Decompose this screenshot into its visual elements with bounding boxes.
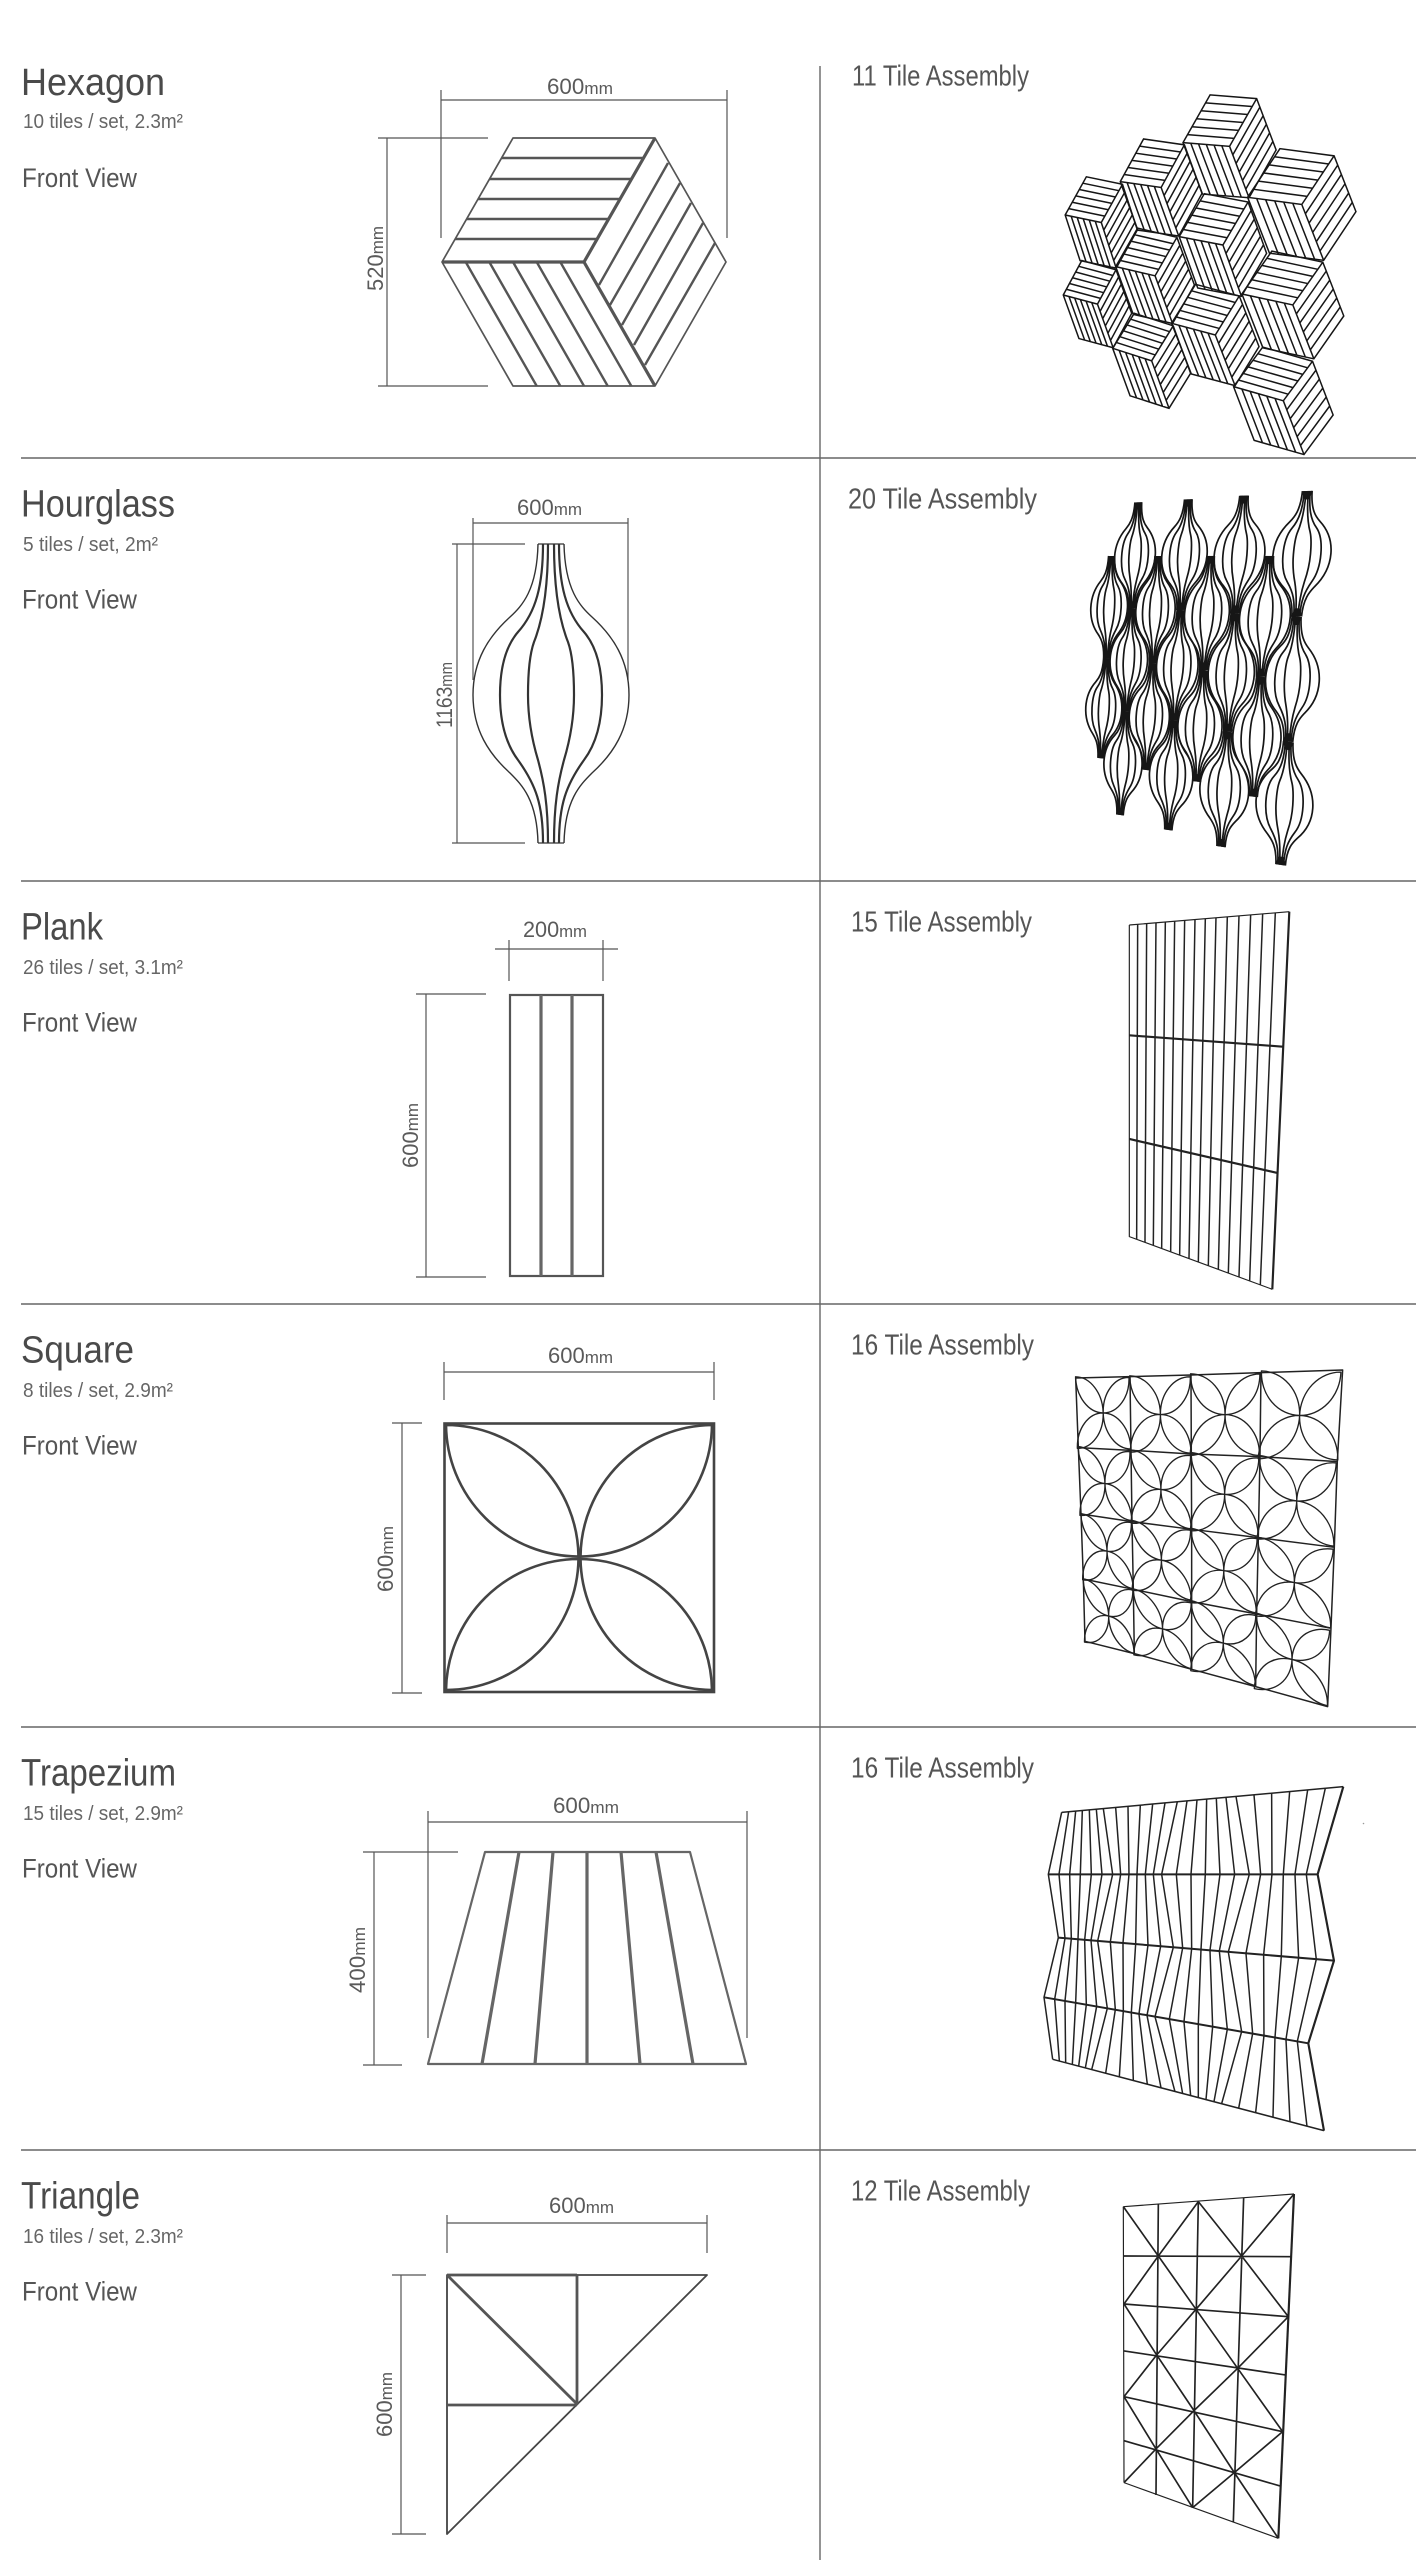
dimension: hexagon height: [363, 138, 488, 386]
assembly: hourglass tiles: [1083, 490, 1336, 869]
front view: hourglass tile: [473, 544, 629, 843]
label: 11 tile assembly: 11 Tile Assembly: [852, 60, 1029, 92]
dimension: trapezium height: 400mm: [345, 1927, 370, 1993]
heading: Triangle: Triangle: [21, 2176, 140, 2218]
dimension: hexagon width: 600mm: [547, 74, 613, 99]
front view: square tile: [444, 1424, 714, 1692]
dimension: square width: 600mm: [548, 1343, 613, 1368]
panel: hourglass row: [21, 484, 1336, 869]
heading: Trapezium: Trapezium: [21, 1752, 176, 1794]
front view: triangle tile: [447, 2275, 707, 2534]
dimension: triangle height: [372, 2275, 426, 2534]
heading: Plank: Plank: [21, 906, 104, 948]
assembly: plank tiles: [1129, 912, 1289, 1289]
panel: plank row: [21, 906, 1289, 1289]
panel: square row: [21, 1330, 1343, 1707]
assembly: triangle tiles: [1123, 2194, 1294, 2538]
dimension: plank height: 600mm: [398, 1103, 423, 1168]
panel: hexagon row: [21, 60, 1361, 462]
dimension: plank width: [495, 917, 618, 981]
label: front view: Front View: [22, 163, 137, 193]
front view: trapezium tile: [428, 1852, 746, 2064]
spec: trapezium set: 15 tiles / set, 2.9m²: [23, 1803, 183, 1825]
label: front view: Front View: [22, 1008, 137, 1038]
label: 20 tile assembly: 20 Tile Assembly: [848, 484, 1037, 516]
speck: [1363, 1823, 1364, 1824]
label: front view: Front View: [22, 1430, 137, 1460]
dimension: hourglass width: [473, 495, 628, 680]
label: front view: Front View: [22, 1854, 137, 1884]
label: 16 tile assembly: 16 Tile Assembly: [851, 1752, 1034, 1784]
panel: trapezium row: [21, 1752, 1364, 2131]
label: front view: Front View: [22, 2276, 137, 2306]
dimension: hourglass height: 1163mm: [432, 662, 457, 728]
front view: hexagon tile: [442, 138, 726, 386]
heading: Square: Square: [21, 1330, 134, 1372]
dimension: hexagon height: 520mm: [363, 226, 388, 291]
heading: Hourglass: Hourglass: [21, 484, 175, 526]
dimension: triangle height: 600mm: [372, 2372, 397, 2437]
label: 16 tile assembly: 16 Tile Assembly: [851, 1330, 1034, 1362]
spec: plank set: 26 tiles / set, 3.1m²: [23, 957, 183, 979]
dimension: trapezium height: [345, 1852, 458, 2065]
dimension: square height: 600mm: [373, 1526, 398, 1592]
spec: triangle set: 16 tiles / set, 2.3m²: [23, 2226, 183, 2248]
dimension: triangle width: [447, 2193, 707, 2253]
heading: Hexagon: Hexagon: [21, 62, 165, 104]
label: 15 tile assembly: 15 Tile Assembly: [851, 906, 1032, 938]
label: front view: Front View: [22, 584, 137, 614]
dimension: hourglass height: [432, 544, 525, 843]
panel: triangle row: [21, 2176, 1294, 2538]
dimension: hexagon width: [441, 74, 727, 238]
spec: hourglass set: 5 tiles / set, 2m²: [23, 534, 158, 556]
dimension: square height: [373, 1423, 422, 1693]
dimension: hourglass width: 600mm: [517, 495, 582, 520]
dimension: trapezium width: [428, 1793, 747, 2038]
assembly: trapezium tiles: [1044, 1787, 1343, 2131]
dimension: plank height: [398, 994, 486, 1277]
front view: plank tile: [510, 995, 603, 1276]
dimension: triangle width: 600mm: [549, 2193, 614, 2218]
label: 12 tile assembly: 12 Tile Assembly: [851, 2176, 1030, 2208]
dimension: square width: [444, 1343, 714, 1400]
dimension: trapezium width: 600mm: [553, 1793, 619, 1818]
spec: hexagon set: 10 tiles / set, 2.3m²: [23, 111, 183, 133]
dimension: plank width: 200mm: [523, 917, 587, 942]
assembly: hexagon tiles: [1062, 93, 1361, 462]
spec: square set: 8 tiles / set, 2.9m²: [23, 1380, 173, 1402]
assembly: square tiles: [1076, 1370, 1343, 1707]
